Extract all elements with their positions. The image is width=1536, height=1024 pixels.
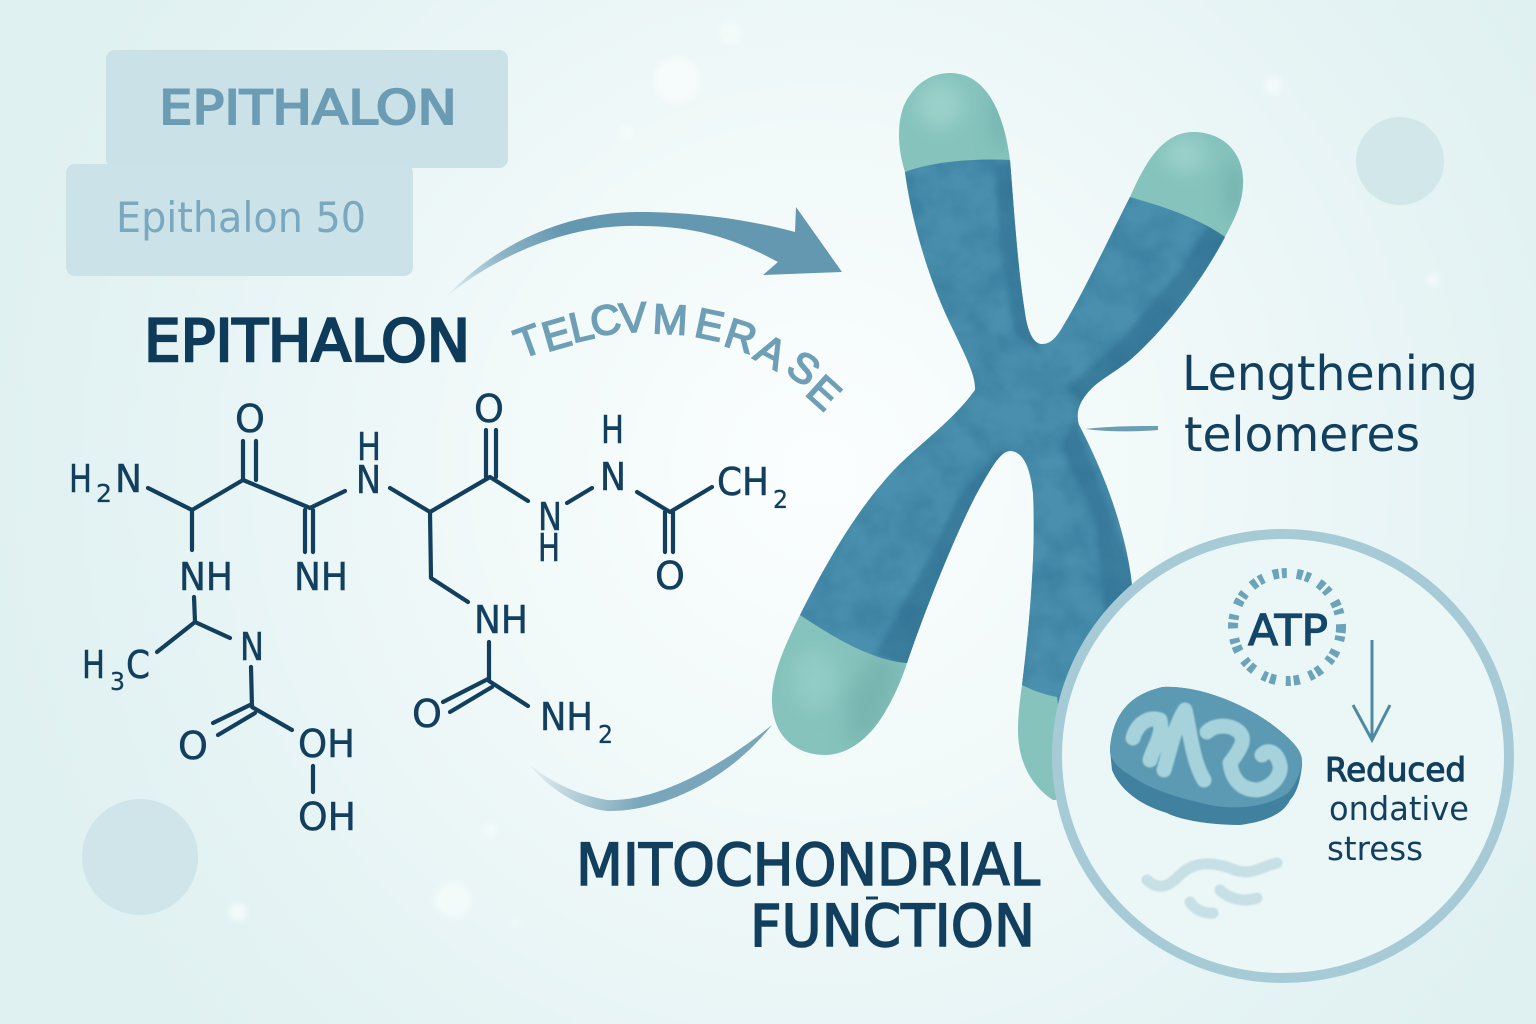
arrow: lower arc toward mitochondrial function <box>530 725 772 811</box>
atom labels: 2 <box>773 485 788 514</box>
telomere caps <box>760 60 1260 820</box>
heading: EPITHALON: EPITHALON <box>144 307 470 375</box>
chromosome shading <box>875 160 1235 670</box>
text: Reduced oxidative stress <box>1325 750 1469 868</box>
atom labels: O <box>178 724 208 768</box>
bonds <box>148 430 712 792</box>
atom labels: H <box>82 643 105 687</box>
arrow: telomerase arc to chromosome <box>448 207 842 295</box>
panel: mitochondrial inset circle <box>1057 534 1509 978</box>
atom labels: CH <box>717 460 769 504</box>
atom labels: 2 <box>96 479 112 508</box>
atom labels: NH <box>540 695 593 739</box>
label: Lengthening telomeres: Lengthening <box>1182 346 1478 402</box>
atom labels: NH <box>179 555 233 599</box>
label: telomerase curved: TELCVMERASE <box>508 293 850 419</box>
atom labels: O <box>235 397 265 441</box>
callout: leader line <box>1085 426 1158 431</box>
atom labels: NH <box>294 555 348 599</box>
icon: faint squiggles <box>1147 863 1277 913</box>
atom labels: 2 <box>598 720 613 749</box>
panel: product name box <box>106 50 508 168</box>
chromosome body <box>800 160 1225 720</box>
decorative bubbles <box>82 22 1444 926</box>
icon: ATP ring <box>1233 573 1341 681</box>
label: Lengthening telomeres <box>1182 346 1478 463</box>
atom labels: H <box>601 408 624 452</box>
atom labels: C <box>126 643 150 687</box>
atom labels <box>69 387 788 839</box>
heading: Mitochondrial function: MITOCHONDRIAL <box>576 831 1040 899</box>
chemical structure: epithalon molecule <box>69 387 788 839</box>
atom labels: H <box>357 425 381 469</box>
heading: Mitochondrial function <box>576 831 1040 960</box>
atom labels: O <box>655 554 685 598</box>
atom labels: N <box>600 455 626 499</box>
text: Reduced oxidative stress: ondative <box>1329 789 1469 828</box>
atom labels: O <box>474 387 504 431</box>
atom labels: O <box>412 692 442 736</box>
atom labels: N <box>115 457 142 501</box>
atom labels: N <box>240 625 264 669</box>
atom labels: OH <box>298 722 355 766</box>
atom labels: 3 <box>110 667 125 696</box>
heading: EPITHALON in box: EPITHALON <box>159 81 457 136</box>
text: Reduced oxidative stress: Reduced <box>1325 750 1466 789</box>
text: Reduced oxidative stress: stress <box>1327 829 1423 868</box>
atom labels: H <box>69 457 92 501</box>
atom labels: N <box>538 495 562 539</box>
arrow: ATP down to reduced stress <box>1353 640 1390 740</box>
icon: mitochondrion <box>1110 687 1302 825</box>
atom labels: NH <box>474 598 528 642</box>
atom labels: H <box>538 526 560 570</box>
atom labels: N <box>356 458 381 502</box>
label: Lengthening telomeres: telomeres <box>1184 407 1420 463</box>
atom labels: OH <box>298 795 356 839</box>
heading: Mitochondrial function: FUNCTION <box>750 892 1035 960</box>
text: Epithalon 50: Epithalon 50 <box>116 193 366 242</box>
icon: chromosome <box>760 60 1260 820</box>
panel: dosage box <box>66 164 413 276</box>
text: ATP: ATP <box>1248 606 1328 656</box>
